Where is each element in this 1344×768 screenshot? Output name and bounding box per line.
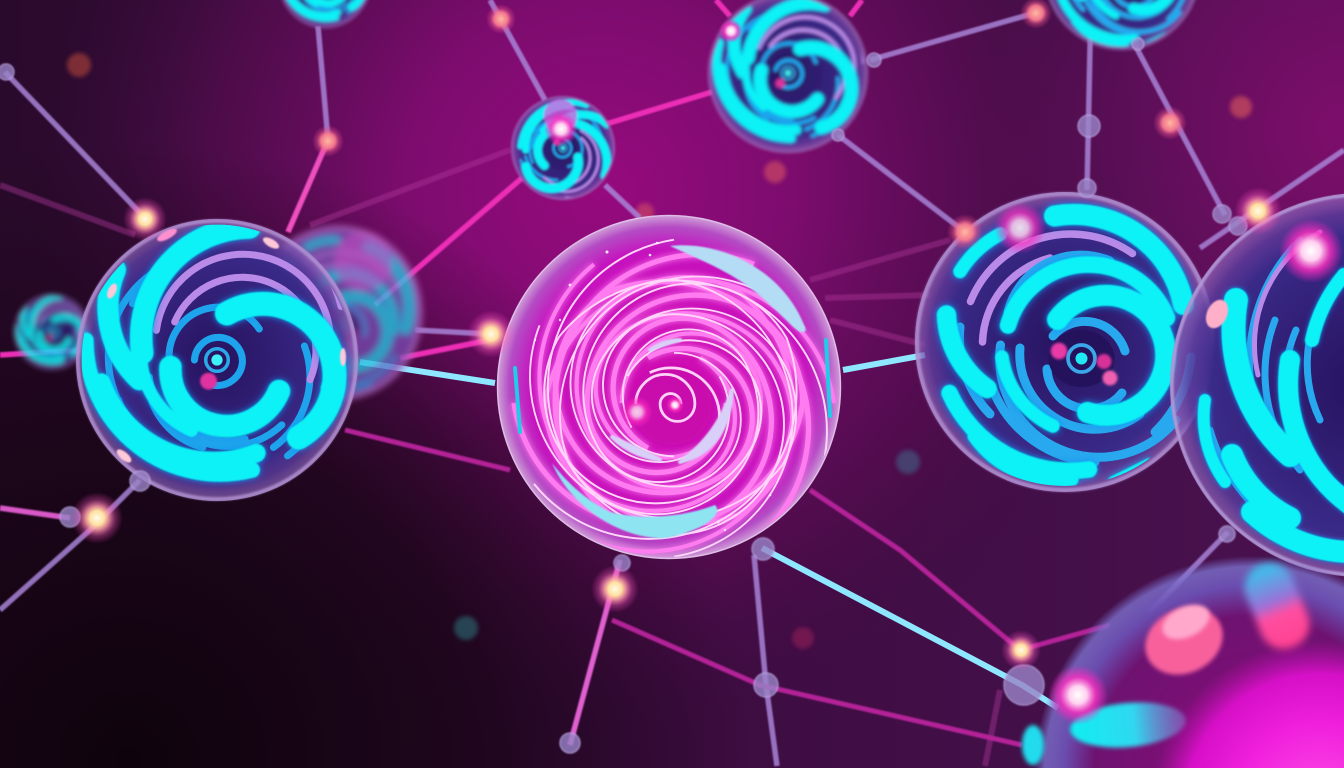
deep magenta connectors <box>345 430 1110 745</box>
glowing nodes soft <box>312 0 1187 250</box>
magenta connectors <box>0 0 862 745</box>
sphere: behind left <box>278 222 426 404</box>
foreground pink lens highlight <box>1157 598 1215 646</box>
central sphere right cyan tick <box>826 340 830 416</box>
small sphere hot spots <box>544 112 578 146</box>
sphere: far left small <box>14 294 90 370</box>
central sphere pale crescent lower left <box>552 463 717 538</box>
sphere: central magenta <box>496 214 842 560</box>
foreground cyan blob <box>1068 698 1188 752</box>
sphere: small top center <box>510 94 616 202</box>
foreground pink lens <box>1134 595 1234 687</box>
sphere: top right partial <box>1044 0 1200 50</box>
central sphere inner pale strokes <box>612 340 732 462</box>
central sphere pink swirl lines <box>508 248 838 556</box>
left sphere rim highlights <box>105 226 346 465</box>
foreground top streak <box>1237 556 1317 656</box>
sphere: right large cyan <box>915 192 1215 492</box>
dim background connectors <box>0 150 1000 766</box>
foreground edge cyan blob <box>1022 725 1044 765</box>
central sphere eye <box>621 365 719 445</box>
sphere: top center right <box>699 0 876 154</box>
sphere: far right cropped <box>1170 193 1344 577</box>
sphere: bottom right blurred foreground <box>1022 548 1344 768</box>
sphere: top left partial <box>279 0 371 28</box>
sphere: large left cyan <box>76 219 358 501</box>
glowing nodes bright <box>71 187 1282 670</box>
central sphere left cyan tick <box>515 368 520 432</box>
central sphere pale crescent upper right <box>670 245 806 332</box>
cyan connectors <box>360 355 1058 708</box>
foreground white glow <box>1048 665 1108 725</box>
blurred bokeh dots <box>67 53 1252 649</box>
far right sphere highlights <box>1279 219 1343 283</box>
central sphere speckles <box>534 242 771 531</box>
right sphere hot spots <box>994 202 1046 254</box>
top sphere hot spot <box>719 19 743 43</box>
central sphere pale swirl lines <box>529 238 828 557</box>
